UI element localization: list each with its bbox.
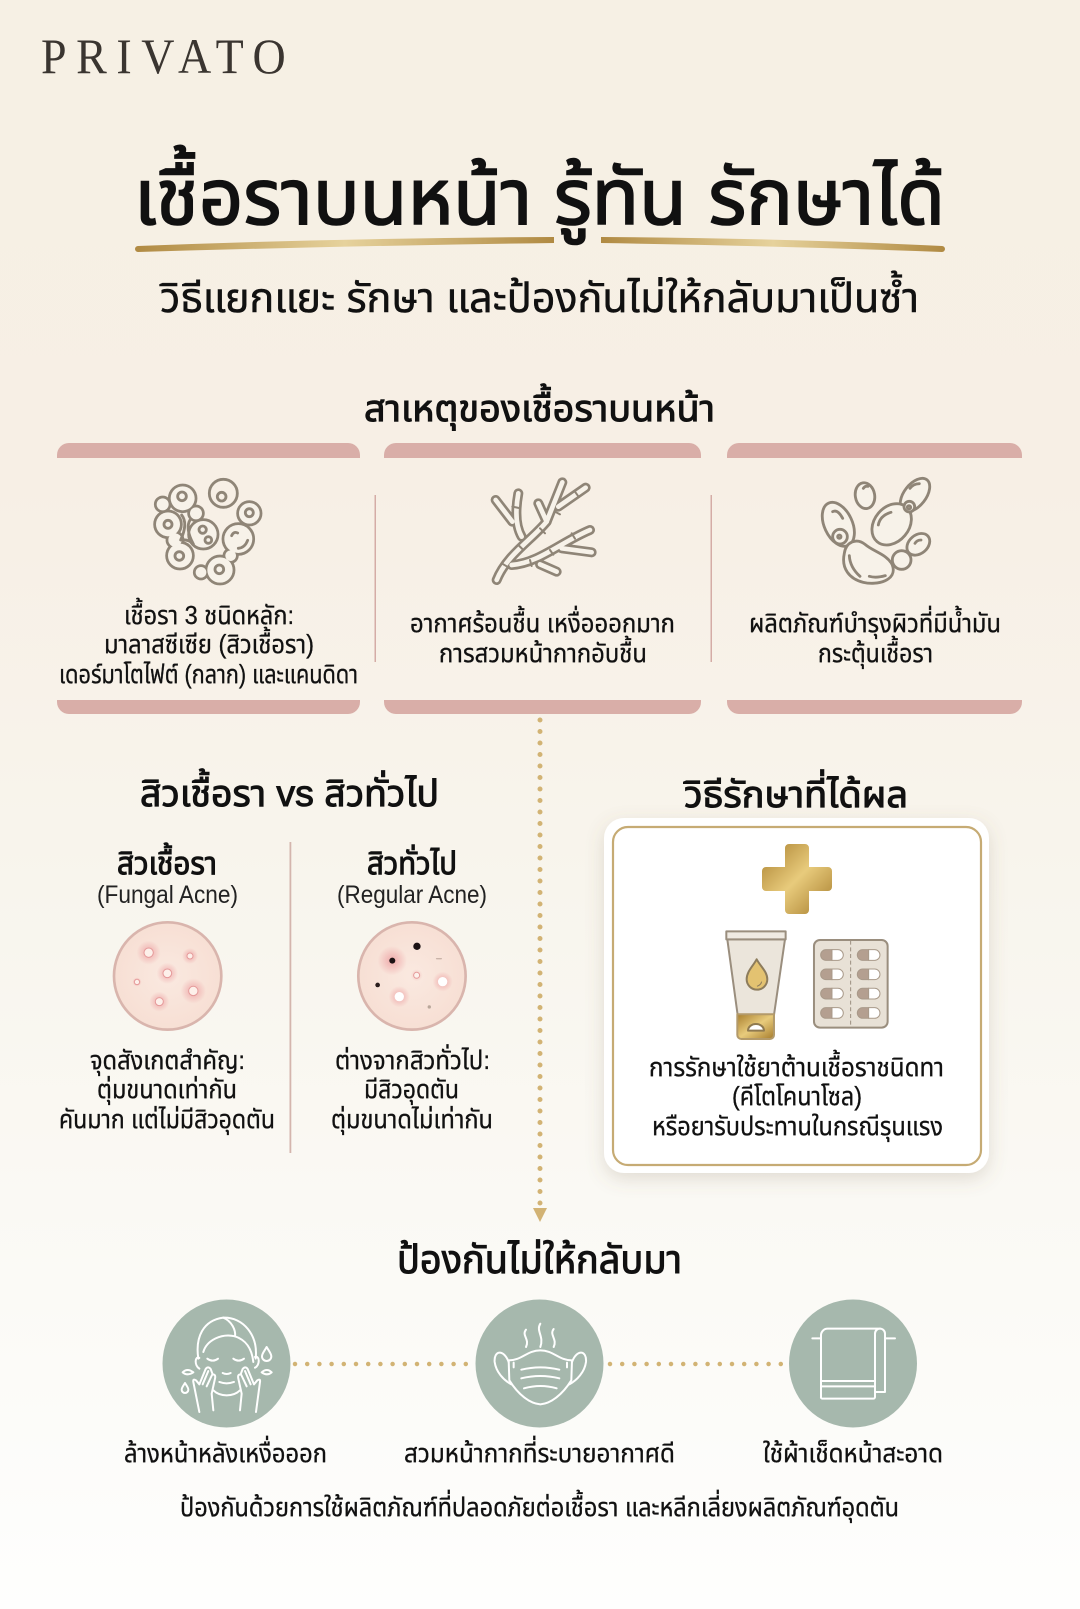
panel: prevention: [124, 1300, 943, 1523]
gold underline: [135, 237, 945, 252]
icon: gold cross: [762, 844, 832, 914]
cause 1 text: เชื้อรา 3 ชนิดหลัก:: [124, 597, 294, 630]
title: เชื้อราบนหน้า รู้ทัน รักษาได้: [134, 145, 945, 245]
dotted flow arrow: [533, 720, 547, 1222]
cause 1 text: มาลาสซีเซีย (สิวเชื้อรา): [104, 626, 314, 659]
fungal acne heading: สิวเชื้อรา: [117, 842, 217, 881]
prevention note: ป้องกันด้วยการใช้ผลิตภัณฑ์ที่ปลอดภัยต่อเชื้อรา และหลีกเลี่ยงผลิตภัณฑ์อุดตัน: [180, 1489, 899, 1523]
prevention labels: ล้างหน้าหลังเหงื่อออก: [124, 1435, 327, 1468]
fungal acne text: จุดสังเกตสำคัญ:: [90, 1045, 245, 1076]
skin illustration: fungal acne: [114, 922, 221, 1030]
comparison heading: สิวเชื้อรา vs สิวทั่วไป: [140, 768, 439, 814]
subtitle: วิธีแยกแยะ รักษา และป้องกันไม่ให้กลับมาเป็นซ้ำ: [159, 270, 919, 321]
treatment text: (คีโตโคนาโซล): [732, 1081, 862, 1111]
icon: towel: [789, 1300, 917, 1428]
panel: causes: [57, 443, 1022, 714]
card background: [604, 818, 989, 1173]
cause 3 text: กระตุ้นเชื้อรา: [818, 635, 933, 669]
treatment heading: วิธีรักษาที่ได้ผล: [683, 769, 908, 815]
cause 1 text: เดอร์มาโตไฟต์ (กลาก) และแคนดิดา: [59, 659, 358, 689]
prevention labels: [124, 1435, 943, 1468]
logo: PRIVATO: PRIVATO: [41, 29, 286, 84]
icon: cream tube: [726, 931, 786, 1039]
cause 2 text: การสวมหน้ากากอับชื้น: [439, 635, 647, 668]
icon: pill blister: [814, 940, 888, 1028]
fungal acne text: [59, 1045, 275, 1135]
dotted connectors: [295, 1362, 786, 1366]
regular acne heading: [337, 844, 487, 909]
cause card bars: [57, 443, 1022, 714]
cause 2 text: [410, 605, 675, 668]
treatment text: [649, 1049, 944, 1142]
cause 2 text: อากาศร้อนชื้น เหงื่อออกมาก: [410, 605, 675, 638]
icon: fungal cells: [155, 479, 261, 584]
treatment text: หรือยารับประทานในกรณีรุนแรง: [652, 1111, 943, 1142]
card gold border: [613, 827, 981, 1165]
icon: face mask: [476, 1300, 604, 1428]
cause 3 text: ผลิตภัณฑ์บำรุงผิวที่มีน้ำมัน: [749, 605, 1001, 639]
regular acne heading: (Regular Acne): [337, 881, 487, 909]
section heading: causes: สาเหตุของเชื้อราบนหน้า: [364, 383, 715, 431]
skin illustration: regular acne: [358, 922, 466, 1030]
prevention labels: สวมหน้ากากที่ระบายอากาศดี: [404, 1435, 675, 1468]
fungal acne heading: (Fungal Acne): [97, 881, 238, 909]
panel: treatment card: [604, 818, 989, 1173]
fungal acne text: ตุ่มขนาดเท่ากัน: [97, 1074, 237, 1105]
icon: face washing: [162, 1300, 290, 1428]
prevention heading: ป้องกันไม่ให้กลับมา: [397, 1239, 682, 1282]
prevention labels: ใช้ผ้าเช็ดหน้าสะอาด: [763, 1438, 943, 1468]
regular acne text: ตุ่มขนาดไม่เท่ากัน: [331, 1104, 493, 1135]
panel: comparison: [59, 768, 493, 1153]
fungal acne text: คันมาก แต่ไม่มีสิวอุดตัน: [59, 1104, 275, 1135]
regular acne text: มีสิวอุดตัน: [364, 1074, 459, 1105]
treatment text: การรักษาใช้ยาต้านเชื้อราชนิดทา: [649, 1049, 944, 1082]
fungal acne heading: [97, 842, 238, 909]
icon: hyphae branches: [496, 482, 592, 580]
icon: yeast cells: [816, 473, 936, 583]
regular acne heading: สิวทั่วไป: [367, 844, 457, 881]
regular acne text: [331, 1043, 493, 1135]
cause 1 text: [59, 597, 358, 689]
cause 3 text: [749, 605, 1001, 669]
regular acne text: ต่างจากสิวทั่วไป:: [335, 1043, 490, 1075]
divider: [290, 842, 291, 1153]
